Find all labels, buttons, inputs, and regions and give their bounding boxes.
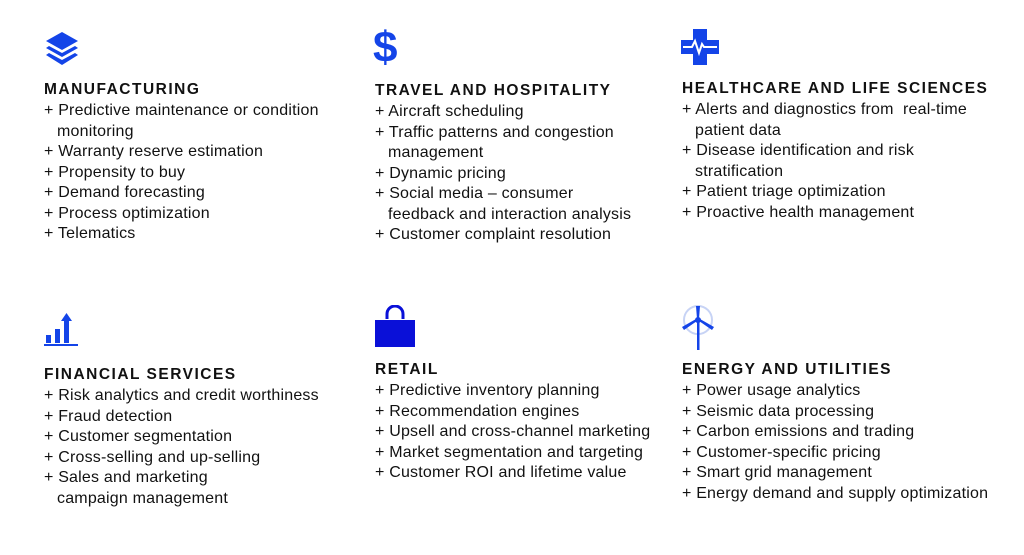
list: retail: + Upsell and cross-channel marketing <box>375 423 650 440</box>
panel: financial <box>44 366 319 506</box>
list: travel: + Dynamic pricing <box>375 164 506 182</box>
list: retail: + Market segmentation and targeting <box>375 444 643 460</box>
list: travel: + Social media – consumer <box>375 185 573 202</box>
list: manufacturing: + Warranty reserve estimation <box>44 143 263 160</box>
heading: travel: TRAVEL AND HOSPITALITY <box>375 82 612 99</box>
icon: medical cross <box>681 29 719 65</box>
list: financial: + Cross-selling and up-selling <box>44 448 260 466</box>
list: healthcare: + Alerts and diagnostics from real-time <box>682 101 967 118</box>
icon: dollar: $ <box>373 23 397 72</box>
panel: energy <box>682 361 988 502</box>
list: retail: + Predictive inventory planning <box>375 382 600 399</box>
list: healthcare: + Disease identification and risk <box>682 142 914 159</box>
list: healthcare: stratification <box>695 162 783 180</box>
list: energy: + Power usage analytics <box>682 382 860 399</box>
list: retail <box>375 382 650 481</box>
list: manufacturing: monitoring <box>57 122 134 140</box>
list: manufacturing: + Predictive maintenance or condition <box>44 102 319 119</box>
list: healthcare: + Proactive health management <box>682 204 914 220</box>
list: healthcare <box>682 101 967 220</box>
list: energy: + Smart grid management <box>682 464 872 481</box>
panel: healthcare <box>682 80 988 220</box>
panel: manufacturing <box>44 81 319 242</box>
list: financial: + Sales and marketing <box>44 469 208 486</box>
list: manufacturing <box>44 102 319 242</box>
list: travel: feedback and interaction analysis <box>388 206 631 222</box>
list: manufacturing: + Demand forecasting <box>44 184 205 201</box>
list: travel: + Traffic patterns and congestion <box>375 124 614 140</box>
list: travel: + Aircraft scheduling <box>375 103 524 120</box>
list: energy: + Seismic data processing <box>682 402 874 420</box>
icon: wind turbine <box>682 305 714 350</box>
list: financial: + Customer segmentation <box>44 428 232 445</box>
list: retail: + Customer ROI and lifetime value <box>375 464 627 481</box>
heading: energy: ENERGY AND UTILITIES <box>682 361 892 378</box>
list: energy: + Carbon emissions and trading <box>682 423 914 440</box>
list: manufacturing: + Propensity to buy <box>44 164 185 180</box>
heading: financial: FINANCIAL SERVICES <box>44 366 237 383</box>
list: energy: + Customer-specific pricing <box>682 444 881 460</box>
list: healthcare: + Patient triage optimization <box>682 183 886 200</box>
list: financial: + Risk analytics and credit worthiness <box>44 387 319 404</box>
list: financial <box>44 387 319 506</box>
list: manufacturing: + Telematics <box>44 225 135 242</box>
list: travel: + Customer complaint resolution <box>375 226 611 243</box>
list: energy <box>682 382 988 502</box>
panel: travel <box>375 82 631 243</box>
icon: layers <box>46 32 78 65</box>
panel: retail <box>375 361 650 481</box>
heading: healthcare: HEALTHCARE AND LIFE SCIENCES <box>682 80 988 97</box>
icon: shopping bag <box>375 305 415 347</box>
heading: manufacturing: MANUFACTURING <box>44 81 200 98</box>
icon: bar chart <box>44 313 78 346</box>
list: healthcare: patient data <box>695 122 781 138</box>
list: financial: + Fraud detection <box>44 408 172 424</box>
list: financial: campaign management <box>57 490 228 506</box>
list: travel <box>375 103 631 243</box>
list: retail: + Recommendation engines <box>375 402 579 420</box>
list: travel: management <box>388 144 483 161</box>
list: energy: + Energy demand and supply optimization <box>682 484 988 502</box>
list: manufacturing: + Process optimization <box>44 204 210 222</box>
heading: retail: RETAIL <box>375 361 439 378</box>
